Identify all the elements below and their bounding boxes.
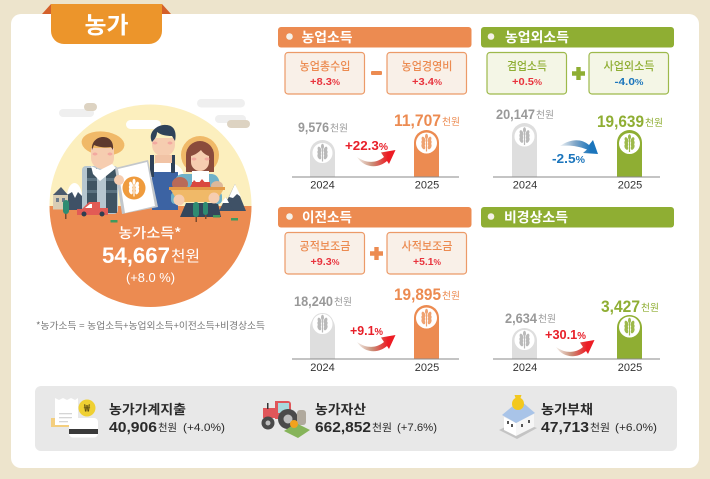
bar chart: 2025 bbox=[618, 362, 642, 374]
stat: 농가부채: (+6.0%) bbox=[615, 422, 657, 434]
bar chart: 20,147 bbox=[496, 107, 535, 122]
bar chart: 천원 bbox=[536, 107, 554, 121]
section header: 이전소득 bbox=[302, 206, 352, 226]
bar chart: 2,634 bbox=[505, 311, 537, 326]
stat: 농가자산: 농가자산 bbox=[315, 399, 366, 418]
bar chart: 천원 bbox=[442, 114, 460, 128]
right mountains bbox=[180, 184, 246, 217]
bar chart bbox=[493, 297, 660, 374]
small cloud bbox=[126, 120, 161, 129]
panel: 농업외소득 bbox=[481, 26, 674, 192]
bar chart: -2.5% bbox=[552, 151, 585, 166]
bar chart: 2024 bbox=[310, 180, 335, 192]
bar chart: 2024 bbox=[310, 362, 335, 374]
stat: 농가가계지출 bbox=[109, 399, 225, 436]
left mountains and house bbox=[53, 183, 82, 210]
farm income summary: (+8.0 %) bbox=[126, 271, 175, 285]
farm income summary: 천원 bbox=[171, 245, 200, 266]
section header: 농업외소득 bbox=[505, 26, 569, 46]
stat: 농가부채: 47,713 bbox=[541, 419, 589, 436]
box: 농업총수입: +8.3% bbox=[310, 76, 340, 88]
illustration: farm family circle bbox=[50, 99, 252, 307]
box: 농업총수입 bbox=[285, 52, 364, 94]
bar chart: 9,576 bbox=[298, 120, 329, 135]
sky bbox=[50, 104, 252, 306]
farm income summary: 농가소득* bbox=[118, 223, 182, 243]
section header bbox=[278, 206, 472, 228]
bar chart: 2025 bbox=[415, 362, 439, 374]
trees bbox=[63, 200, 208, 222]
plus sign bbox=[370, 247, 383, 260]
bar chart: 2025 bbox=[415, 180, 439, 192]
panel: 농업소득 bbox=[278, 26, 472, 192]
bar chart: +9.1% bbox=[350, 323, 383, 338]
basket bbox=[169, 177, 225, 206]
box: 공적보조금 bbox=[285, 232, 364, 274]
icon: tractor and money bbox=[262, 401, 310, 438]
panel: 비경상소득 bbox=[481, 206, 674, 374]
box: 공적보조금: 공적보조금 bbox=[300, 238, 351, 254]
box: 사업외소득: -4.0 % bbox=[614, 76, 644, 88]
stat: 농가가계지출: 농가가계지출 bbox=[109, 399, 186, 418]
man center bbox=[150, 125, 184, 210]
stat: 농가가계지출: 천원 bbox=[158, 420, 177, 435]
box: 농업총수입: 농업총수입 bbox=[300, 58, 350, 74]
section header: 농업소득 bbox=[302, 26, 352, 46]
stat: 농가자산 bbox=[315, 399, 437, 436]
grass tufts bbox=[110, 215, 238, 222]
bar chart: 천원 bbox=[538, 311, 556, 325]
box: 사업외소득 bbox=[589, 52, 668, 94]
stat: 농가부채: 천원 bbox=[590, 420, 610, 435]
plus sign bbox=[572, 67, 585, 80]
stat: 농가가계지출: 40,906 bbox=[109, 419, 157, 436]
stat: 농가자산: (+7.6%) bbox=[397, 422, 437, 434]
bar chart: 18,240 bbox=[294, 294, 333, 309]
bar chart: 19,639 bbox=[597, 112, 644, 131]
bar chart: 3,427 bbox=[601, 297, 640, 316]
box: 사적보조금: +5.1% bbox=[413, 256, 441, 268]
farm income summary: 54,667 bbox=[102, 243, 170, 268]
ground bbox=[50, 206, 252, 307]
box: 사업외소득: 사업외소득 bbox=[604, 58, 655, 74]
box: 겸업소득: +0.5% bbox=[512, 76, 542, 88]
panel: 이전소득 bbox=[278, 206, 472, 374]
stat: 농가자산: 천원 bbox=[372, 420, 392, 435]
bar chart: +22.3% bbox=[345, 138, 388, 153]
stat: 농가부채 bbox=[541, 399, 657, 436]
bar chart: 천원 bbox=[645, 115, 663, 129]
box: 겸업소득: 겸업소득 bbox=[507, 58, 547, 74]
box: 농업경영비: 농업경영비 bbox=[402, 58, 452, 74]
man left bbox=[80, 129, 126, 214]
bar chart: 천원 bbox=[641, 300, 659, 314]
section header: 비경상소득 bbox=[504, 206, 568, 226]
stat: 농가가계지출: (+4.0%) bbox=[183, 422, 225, 434]
bar chart: 2024 bbox=[513, 180, 537, 192]
bottom summary panel bbox=[35, 386, 677, 451]
section header bbox=[481, 206, 674, 228]
grain sack bbox=[114, 160, 158, 214]
bar chart: +30.1% bbox=[545, 327, 586, 342]
icon: house with money bag bbox=[499, 395, 537, 439]
section header bbox=[481, 26, 674, 48]
bar chart bbox=[292, 285, 460, 374]
box: 농업경영비 bbox=[387, 52, 466, 94]
icon: receipt, coin and card: ₩ bbox=[83, 400, 91, 414]
minus sign bbox=[371, 71, 382, 75]
section header bbox=[278, 26, 472, 48]
box: 공적보조금: +9.3% bbox=[310, 256, 340, 268]
woman bbox=[171, 136, 222, 204]
stat: 농가부채: 농가부채 bbox=[541, 399, 593, 418]
bar chart: 11,707 bbox=[394, 111, 441, 130]
bar chart: 2024 bbox=[513, 362, 537, 374]
farm income summary bbox=[102, 223, 200, 285]
footnote: *농가소득 = 농업소득+농업외소득+이전소득+비경상소득 bbox=[36, 318, 265, 332]
bar chart bbox=[292, 111, 460, 192]
bar chart: 천원 bbox=[334, 294, 352, 308]
tab heading: 농가: 농가 bbox=[84, 6, 128, 40]
box: 사적보조금 bbox=[387, 232, 466, 274]
bar chart: 천원 bbox=[330, 120, 348, 134]
bar chart bbox=[493, 107, 663, 192]
box: 사적보조금: 사적보조금 bbox=[402, 238, 453, 254]
box: 농업경영비: +3.4% bbox=[412, 76, 442, 88]
bar chart: 천원 bbox=[442, 288, 460, 302]
icon: receipt, coin and card bbox=[51, 398, 98, 438]
box: 겸업소득 bbox=[487, 52, 566, 94]
tab heading: 농가 bbox=[42, 4, 171, 44]
pickup truck bbox=[77, 202, 108, 216]
bar chart: 19,895 bbox=[394, 285, 441, 304]
bar chart: 2025 bbox=[618, 180, 642, 192]
clouds bbox=[59, 99, 250, 128]
stat: 농가자산: 662,852 bbox=[315, 419, 371, 436]
